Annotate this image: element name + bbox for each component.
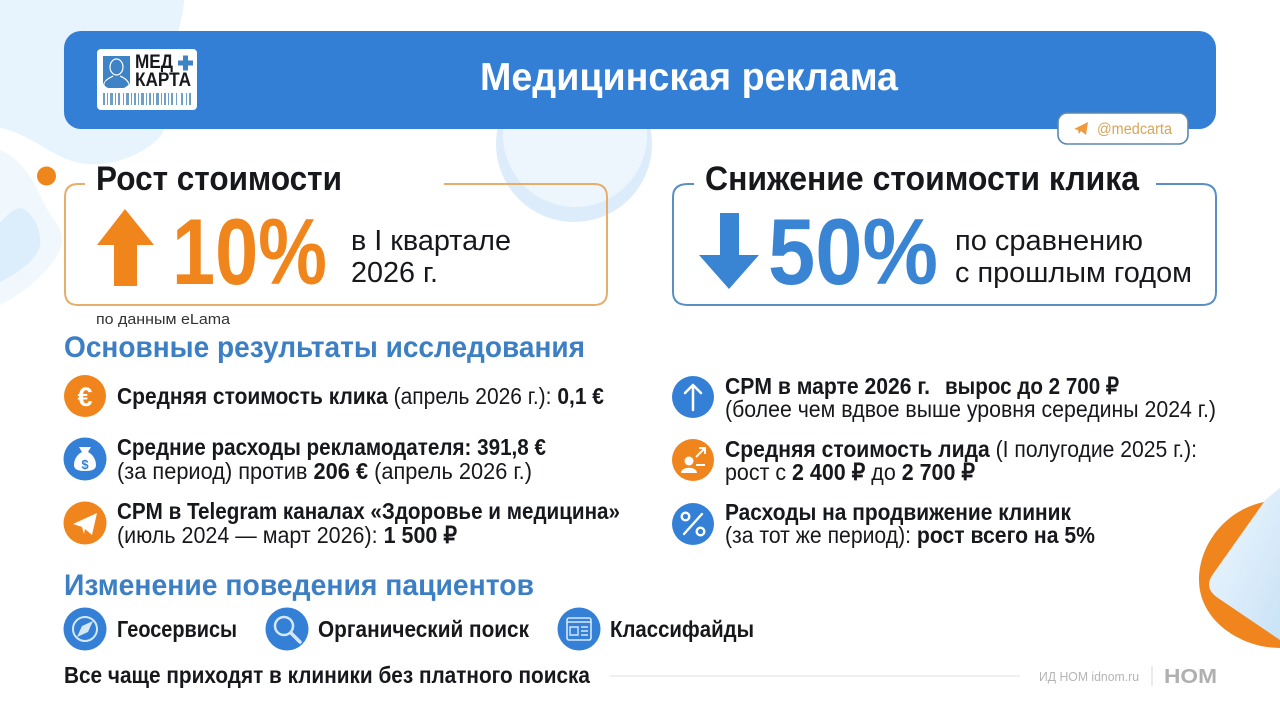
item: average click cost: Средняя стоимость клика (апрель 2026 г.): 0,1 € [117, 383, 604, 409]
comparison text [955, 225, 1192, 289]
footer brand [1039, 666, 1217, 688]
heading: patient behaviour: Изменение поведения пациентов [64, 569, 534, 602]
icon: down arrow [699, 213, 759, 289]
period text [351, 225, 511, 289]
panel: rise in cost [65, 160, 607, 305]
header banner [64, 31, 1216, 129]
logo: MedKarta: КАРТА [135, 70, 191, 91]
logo: MedKarta: МЕД [135, 52, 173, 73]
footer brand: ИД НОМ idnom.ru [1039, 669, 1139, 684]
item: CPM in Telegram: (июль 2024 — март 2026): 1 500 ₽ [117, 522, 457, 548]
period text: в I квартале [351, 225, 511, 257]
item: average click cost [64, 375, 604, 417]
value 50%: 50% [768, 199, 938, 304]
heading: main results: Основные результаты исследования [64, 331, 585, 364]
item: advertiser spend: (за период) против 206 € (апрель 2026 г.) [117, 458, 532, 484]
item: clinic promotion spend: Расходы на продвижение клиник [725, 499, 1071, 525]
item: lead cost: рост с 2 400 ₽ до 2 700 ₽ [725, 459, 975, 485]
item: lead cost [672, 436, 1197, 485]
item: advertiser spend [64, 434, 546, 484]
item: CPM in March: CPM в марте 2026 г. [725, 373, 930, 399]
item: CPM in March [672, 373, 1216, 422]
item: clinic promotion spend [672, 499, 1095, 548]
behaviour: organic search: Органический поиск [318, 616, 529, 642]
heading: decrease: Снижение стоимости клика [705, 160, 1140, 198]
item: clinic promotion spend: (за тот же период): рост всего на 5% [725, 522, 1095, 548]
icon: up arrow [97, 209, 154, 286]
behaviour: geoservices: Геосервисы [117, 616, 237, 642]
telegram handle tag: @medcarta [1097, 121, 1172, 138]
conclusion line: Все чаще приходят в клиники без платного поиска [64, 662, 591, 688]
item: lead cost: Средняя стоимость лида (I полугодие 2025 г.): [725, 436, 1197, 462]
value 10%: 10% [172, 199, 327, 304]
source note: по данным eLama [96, 311, 231, 328]
item: average click cost: € [77, 382, 93, 412]
comparison text: с прошлым годом [955, 257, 1192, 289]
item: CPM in Telegram [64, 498, 620, 548]
telegram handle tag [1058, 113, 1188, 144]
item: CPM in Telegram: CPM в Telegram каналах «Здоровье и медицина» [117, 498, 620, 524]
behaviour: organic search [266, 608, 529, 650]
behaviour: classifieds [558, 608, 754, 650]
orange corner accent [1199, 502, 1280, 648]
behaviour: classifieds: Классифайды [610, 616, 754, 642]
item: CPM in March: (более чем вдвое выше уровня середины 2024 г.) [725, 396, 1216, 422]
behaviour: geoservices [64, 608, 237, 650]
footer brand: НОМ [1164, 666, 1217, 688]
heading: rise: Рост стоимости [96, 160, 342, 198]
item: advertiser spend: $ [81, 457, 89, 472]
item: CPM in March: вырос до 2 700 ₽ [945, 373, 1119, 399]
period text: 2026 г. [351, 257, 438, 289]
orange dot [37, 166, 56, 186]
panel: click cost decrease [673, 160, 1216, 305]
logo: MedKarta [97, 49, 197, 110]
item: advertiser spend: Средние расходы рекламодателя: 391,8 € [117, 434, 546, 460]
title: Медицинская реклама [480, 56, 898, 99]
comparison text: по сравнению [955, 225, 1143, 257]
